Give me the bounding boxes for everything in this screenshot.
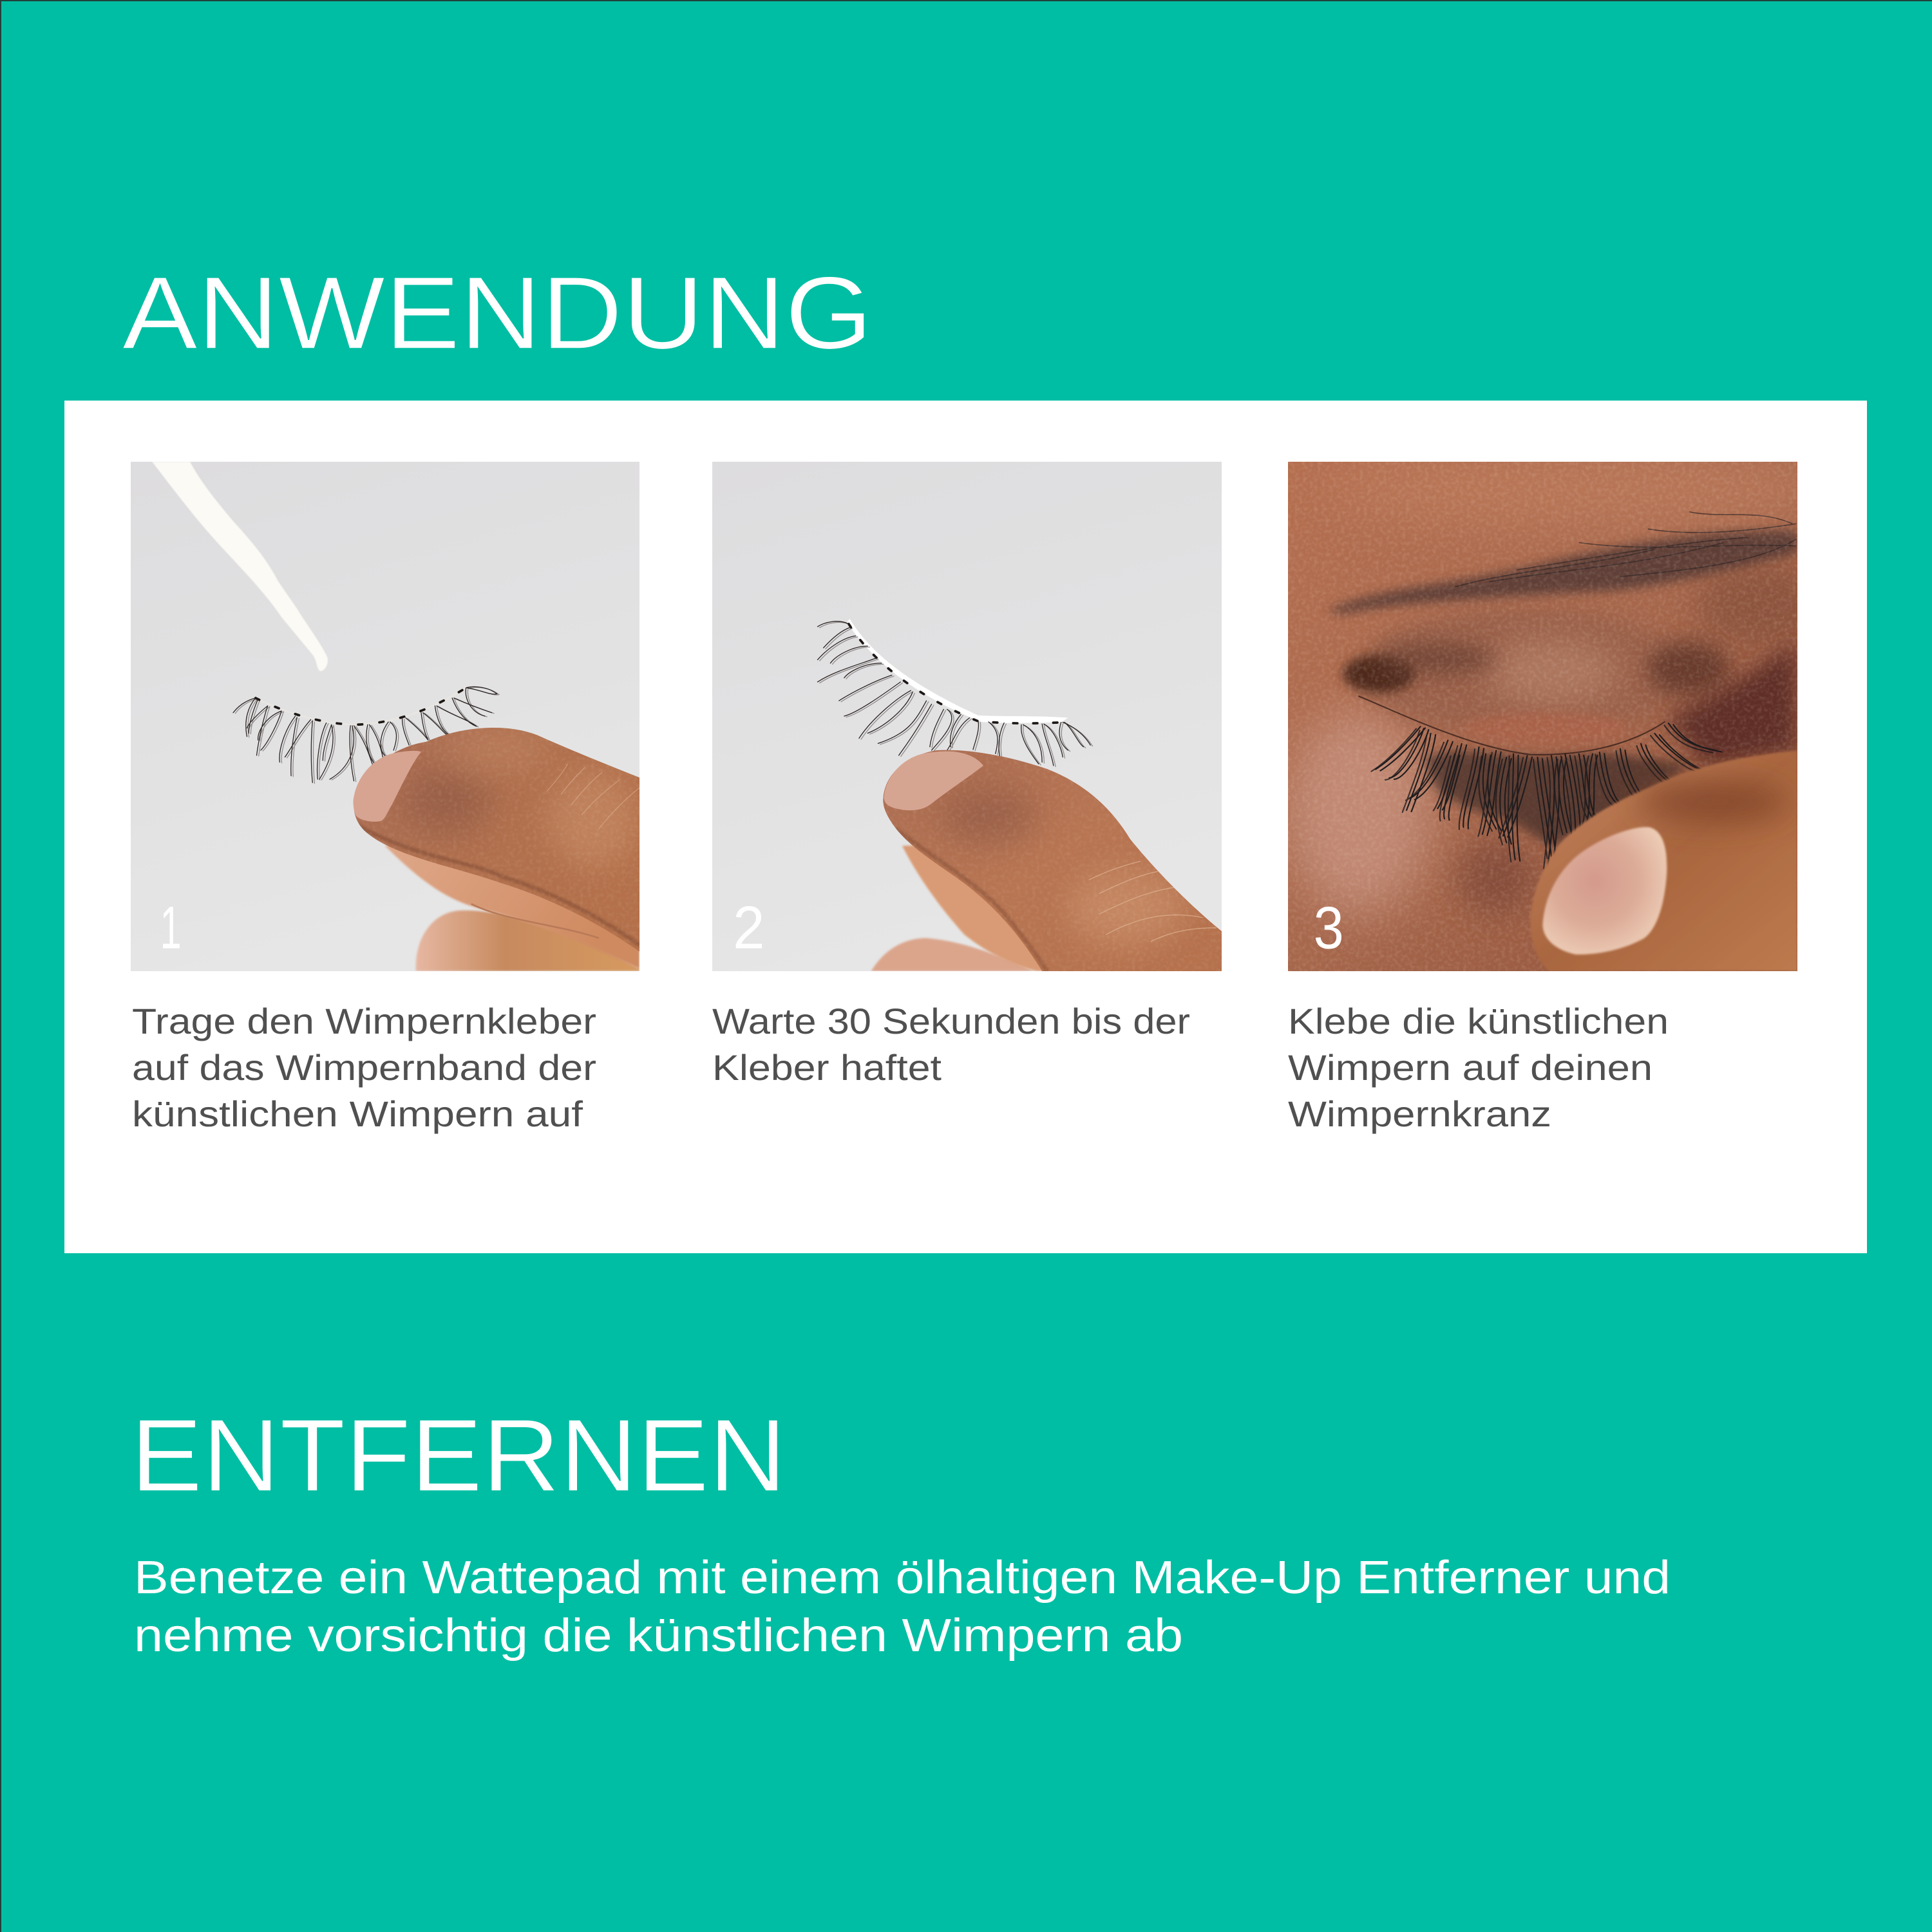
lashes [1372, 723, 1721, 869]
caption 1: künstlichen Wimpern auf [132, 1094, 583, 1134]
eyelid crease [1358, 696, 1665, 755]
removal instructions: Benetze ein Wattepad mit einem ölhaltigen Make-Up Entferner und [134, 1552, 1671, 1604]
lower finger [416, 911, 639, 971]
upper right shade [1696, 563, 1820, 645]
cheek highlight [1286, 710, 1431, 914]
lid highlight [1486, 639, 1617, 705]
caption 2: Kleber haftet [712, 1047, 942, 1088]
socket shadow right [1648, 641, 1730, 696]
caption 1: auf das Wimpernband der [132, 1047, 596, 1088]
lid warm edge [1462, 713, 1627, 744]
caption 3: Wimpernkranz [1288, 1094, 1551, 1134]
crease between finger sections [471, 904, 599, 938]
right cheek shadow [1665, 641, 1797, 768]
false lash [233, 687, 499, 783]
photo 3: lash on eye [1288, 462, 1797, 971]
fingertip [1531, 750, 1797, 971]
fingernail [1543, 827, 1667, 954]
main finger [882, 747, 1224, 972]
finger underside [902, 842, 1116, 971]
eyebrow [1327, 512, 1797, 614]
caption 3 [1288, 1001, 1669, 1134]
caption 3: Wimpern auf deinen [1288, 1047, 1653, 1088]
caption 2 [712, 1001, 1190, 1088]
removal instructions [134, 1552, 1671, 1662]
photo 1: glue applied to lash [131, 462, 639, 971]
removal instructions: nehme vorsichtig die künstlichen Wimpern ab [134, 1610, 1183, 1662]
main finger [350, 719, 640, 958]
false lash with glue band [818, 619, 1092, 766]
thumbnail [884, 752, 983, 810]
number 2: 2 [733, 894, 765, 961]
thumbnail [353, 751, 421, 822]
panel: steps [64, 401, 1867, 1253]
under-eye shadow [1458, 839, 1534, 914]
number 1: 1 [160, 894, 182, 961]
caption 3: Klebe die künstlichen [1288, 1001, 1669, 1041]
heading: Entfernen: ENTFERNEN [131, 1397, 786, 1513]
socket shadow left [1343, 655, 1415, 692]
caption 2: Warte 30 Sekunden bis der [712, 1001, 1190, 1041]
socket shadow band [1379, 643, 1496, 674]
eyelid [1358, 607, 1689, 737]
caption 1 [132, 1001, 596, 1134]
lower finger [871, 938, 1034, 971]
forehead tone [1327, 447, 1844, 529]
number 3: 3 [1314, 894, 1344, 961]
skin pores [1288, 462, 1797, 971]
glue applicator [152, 462, 328, 671]
finger underside [385, 826, 639, 969]
caption 1: Trage den Wimpernkleber [132, 1001, 596, 1041]
photo 2: waiting for glue [712, 462, 1222, 971]
heading: Anwendung: ANWENDUNG [122, 255, 873, 370]
